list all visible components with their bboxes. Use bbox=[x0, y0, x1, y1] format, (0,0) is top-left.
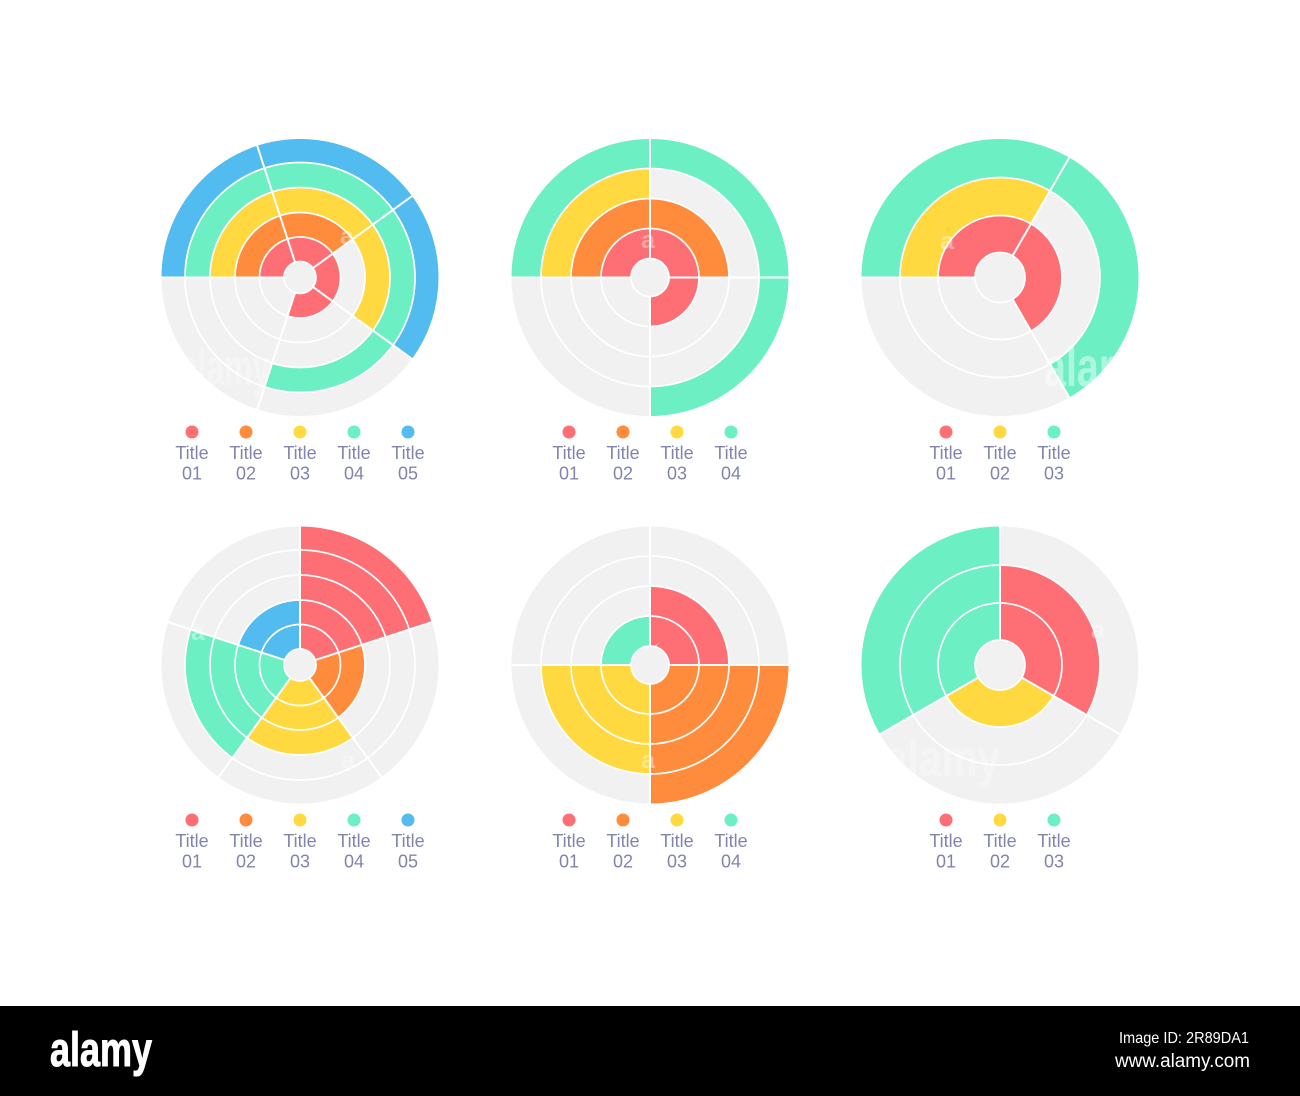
website: www.alamy.com bbox=[1114, 1051, 1250, 1072]
legend: chart 4: 05 bbox=[398, 852, 418, 872]
legend: chart 4: 03 bbox=[290, 852, 310, 872]
chart 6: three-series rose chart bbox=[862, 525, 1138, 804]
chart 4: five-series rose chart bbox=[162, 525, 438, 804]
chart 6 coloured wedges bbox=[888, 553, 1112, 777]
legend: chart 6 bbox=[929, 814, 1071, 872]
legend: chart 6: Title bbox=[983, 831, 1017, 851]
legend: chart 4: Title bbox=[337, 831, 371, 851]
legend: chart 4: Title bbox=[175, 831, 209, 851]
legend: chart 3: Title bbox=[983, 443, 1017, 463]
legend: chart 4: 02 bbox=[236, 852, 256, 872]
chart 4 coloured wedges bbox=[209, 574, 391, 756]
legend: chart 2: Title bbox=[714, 443, 748, 463]
legend: chart 4: Title bbox=[283, 831, 317, 851]
legend: chart 3: 02 bbox=[990, 464, 1010, 484]
legend: chart 4: 04 bbox=[344, 852, 364, 872]
legend: chart 6: 02 bbox=[990, 852, 1010, 872]
legend: chart 5: 03 bbox=[667, 852, 687, 872]
legend: chart 1: Title bbox=[337, 443, 371, 463]
watermarks: alamy bbox=[885, 730, 1000, 788]
legend: chart 3: 03 bbox=[1044, 464, 1064, 484]
legend: chart 5: 01 bbox=[559, 852, 579, 872]
legend: chart 6: Title bbox=[929, 831, 963, 851]
legend: chart 2: 03 bbox=[667, 464, 687, 484]
legend: chart 1: Title bbox=[229, 443, 263, 463]
legend: chart 1: 04 bbox=[344, 464, 364, 484]
legend: chart 1: Title bbox=[283, 443, 317, 463]
legend: chart 1: 01 bbox=[182, 464, 202, 484]
chart 1: five-series stacked radial chart bbox=[160, 139, 438, 416]
legend: chart 5 bbox=[552, 814, 748, 872]
legend: chart 2: Title bbox=[660, 443, 694, 463]
legend: chart 5: Title bbox=[606, 831, 640, 851]
chart 3: three-series stacked radial chart bbox=[860, 139, 1138, 416]
watermarks: a bbox=[340, 223, 355, 250]
legend: chart 2: Title bbox=[606, 443, 640, 463]
watermarks: a bbox=[1091, 617, 1106, 644]
watermarks: a bbox=[641, 747, 656, 774]
legend: chart 5: Title bbox=[660, 831, 694, 851]
footer bar bbox=[0, 1006, 1300, 1096]
legend: chart 6: 03 bbox=[1044, 852, 1064, 872]
legend: chart 2: Title bbox=[552, 443, 586, 463]
legend: chart 1: 03 bbox=[290, 464, 310, 484]
watermarks: a bbox=[191, 619, 206, 646]
legend: chart 2: 01 bbox=[559, 464, 579, 484]
legend: chart 6: 01 bbox=[936, 852, 956, 872]
chart 1 coloured rings bbox=[173, 151, 427, 404]
legend: chart 2 bbox=[552, 426, 748, 484]
legend: chart 1: Title bbox=[391, 443, 425, 463]
chart 2: four-series stacked radial chart bbox=[510, 138, 790, 418]
legend: chart 5: Title bbox=[552, 831, 586, 851]
legend: chart 1: 02 bbox=[236, 464, 256, 484]
watermarks: alamy bbox=[180, 339, 270, 397]
legend: chart 5: Title bbox=[714, 831, 748, 851]
chart 5: four-series rose chart bbox=[510, 525, 790, 805]
watermarks: a bbox=[641, 227, 656, 254]
watermarks bbox=[180, 223, 1134, 788]
legend: chart 3: Title bbox=[1037, 443, 1071, 463]
legend: chart 3 bbox=[929, 426, 1071, 484]
legend: chart 1 bbox=[175, 426, 425, 484]
watermarks: a bbox=[940, 228, 955, 255]
chart 5 coloured wedges bbox=[571, 586, 729, 744]
chart 3 coloured rings bbox=[881, 158, 1119, 397]
legend: chart 6: Title bbox=[1037, 831, 1071, 851]
legend: chart 4: Title bbox=[391, 831, 425, 851]
legend: chart 2: 04 bbox=[721, 464, 741, 484]
legend: chart 5: 02 bbox=[613, 852, 633, 872]
legend: chart 4: 01 bbox=[182, 852, 202, 872]
legend: chart 2: 02 bbox=[613, 464, 633, 484]
legend: chart 1: Title bbox=[175, 443, 209, 463]
watermarks: a bbox=[341, 747, 356, 774]
image id: Image ID: 2R89DA1 bbox=[1119, 1030, 1249, 1047]
legend: chart 3: 01 bbox=[936, 464, 956, 484]
legend: chart 5: 04 bbox=[721, 852, 741, 872]
legend: chart 4 bbox=[175, 814, 425, 872]
footer logo: alamy bbox=[50, 1024, 152, 1077]
legend: chart 4: Title bbox=[229, 831, 263, 851]
legend: chart 3: Title bbox=[929, 443, 963, 463]
chart 2 coloured rings bbox=[526, 154, 774, 401]
legend: chart 1: 05 bbox=[398, 464, 418, 484]
watermarks: alam bbox=[1044, 335, 1134, 398]
